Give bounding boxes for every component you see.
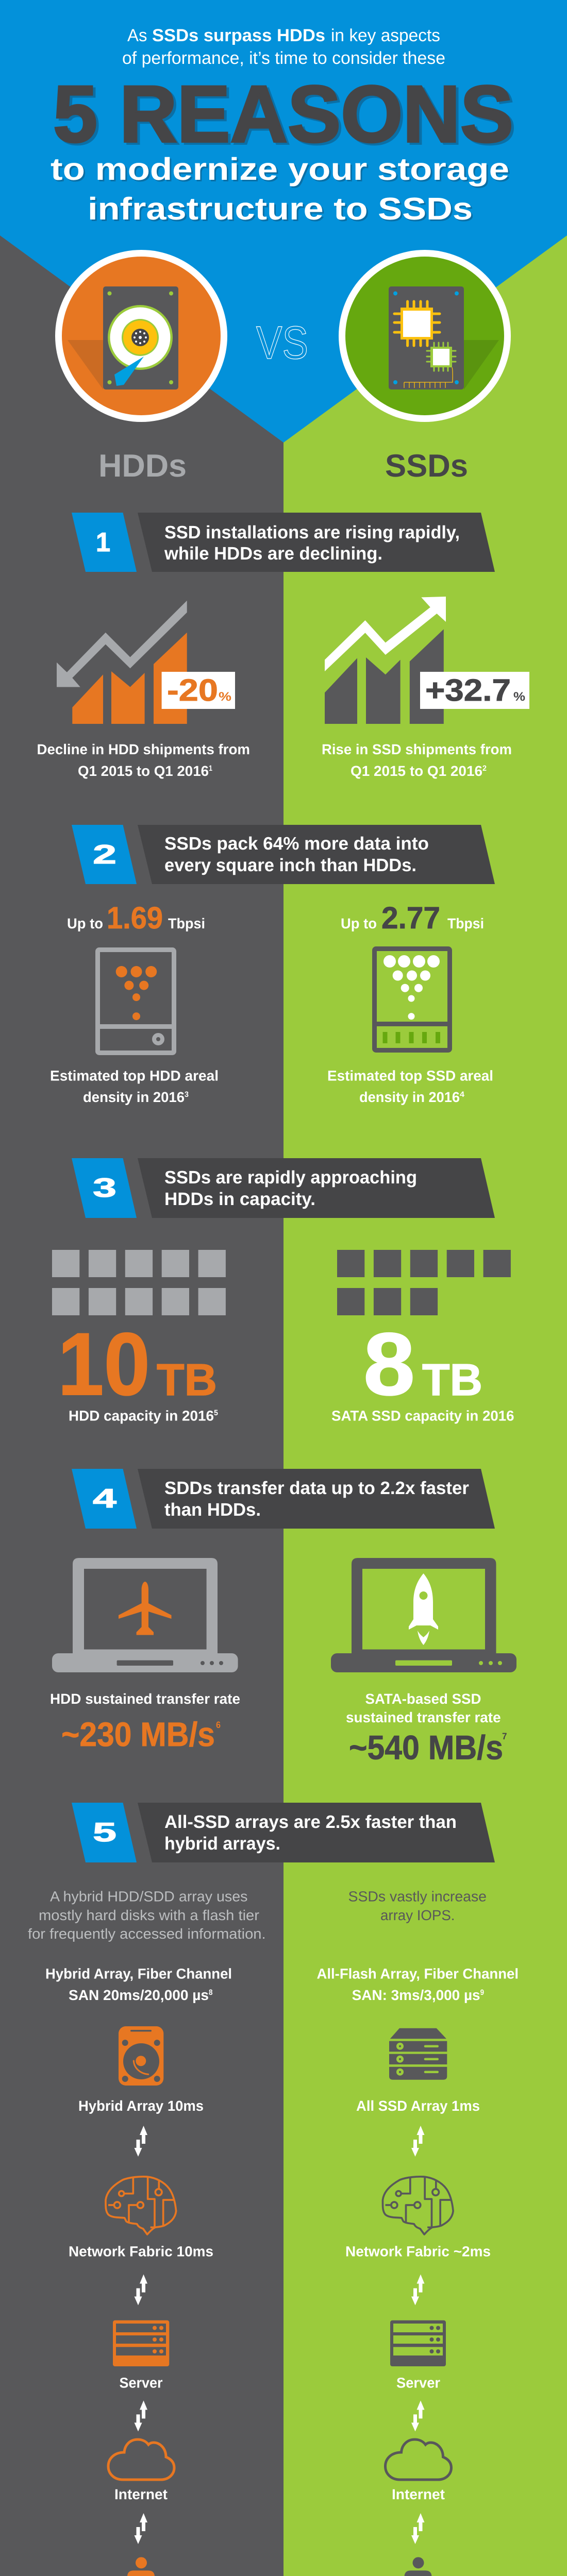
stat: HDD transfer rate: ~230 MB/s [61, 1715, 215, 1753]
caption: HDD density: Estimated top HDD areal [50, 1068, 219, 1084]
icon: end user, SSD [404, 2557, 431, 2576]
banner 5: hybrid arrays. [164, 1834, 280, 1854]
intro text [122, 26, 445, 68]
text: hybrid array description [28, 1889, 266, 1942]
banner 2: 2 [93, 840, 116, 870]
stat: SSD areal density: Tbpsi [447, 916, 484, 931]
subtitle [51, 151, 509, 226]
stat: 10 TB [58, 1315, 217, 1414]
squares: SSD capacity [337, 1250, 511, 1315]
banner 3 [72, 1158, 495, 1218]
stat: 8 TB: TB [422, 1355, 482, 1405]
caption: SSD density: Estimated top SSD areal [327, 1068, 493, 1084]
stat: 8 TB [363, 1315, 482, 1414]
icon: HDD badge [55, 250, 227, 422]
arrows: SSD path [411, 2126, 425, 2544]
stat: HDD transfer rate: 6 [216, 1720, 221, 1730]
caption: SSD shipments: 2 [482, 764, 487, 773]
squares: HDD capacity [52, 1250, 226, 1315]
icon: server, SSD [390, 2320, 446, 2366]
banner 4 [72, 1469, 495, 1529]
label: server SSD: Server [396, 2375, 440, 2391]
banner 2: every square inch than HDDs. [164, 855, 416, 875]
banner 3: HDDs in capacity. [164, 1189, 315, 1209]
caption: SSD shipments [322, 741, 512, 779]
caption: all-flash array latency: All-Flash Array, Fiber Channel [316, 1966, 519, 1982]
text: hybrid array description: mostly hard disks with a flash tier [39, 1907, 259, 1923]
caption: HDD density [50, 1068, 219, 1105]
chart: SSD rise: % [513, 690, 525, 704]
text: hybrid array description: for frequently accessed information. [28, 1926, 266, 1942]
caption: SSD density: density in 2016 [359, 1089, 460, 1105]
label: internet SSD: Internet [392, 2486, 445, 2502]
caption: hybrid array latency: Hybrid Array, Fiber Channel [45, 1966, 232, 1982]
caption: HDD capacity: 5 [214, 1409, 218, 1417]
banner 1 [72, 513, 495, 572]
caption: hybrid array latency: SAN 20ms/20,000 µs [69, 1987, 209, 2003]
stat: SSD transfer rate: sustained transfer rate [346, 1709, 501, 1725]
banner 4: SDDs transfer data up to 2.2x faster [164, 1478, 469, 1498]
intro text: in key aspects [331, 26, 440, 45]
banner 2: SSDs pack 64% more data into [164, 834, 429, 854]
arrows: hybrid path [134, 2126, 147, 2544]
caption: SSD shipments: Rise in SSD shipments from [322, 741, 512, 757]
banner 1: SSD installations are rising rapidly, [164, 522, 460, 543]
label: network fabric SSD: Network Fabric ~2ms [345, 2243, 491, 2260]
caption: hybrid array latency [45, 1966, 232, 2003]
stat: HDD transfer rate: HDD sustained transfer rate [50, 1691, 240, 1707]
stat: SSD transfer rate: SATA-based SSD [365, 1691, 481, 1707]
caption: SSD density [327, 1068, 493, 1105]
caption: SSD shipments: Q1 2015 to Q1 2016 [351, 763, 482, 779]
stat: HDD areal density [67, 901, 205, 935]
caption: hybrid array latency: 8 [209, 1988, 212, 1997]
chart: HDD decline: -20 [167, 673, 218, 707]
caption: HDD shipments: Decline in HDD shipments from [37, 741, 250, 757]
icon: SSD density device [372, 949, 452, 1050]
icon: cloud, SSD [386, 2439, 452, 2480]
caption: all-flash array latency [316, 1966, 519, 2003]
icon: laptop with rocket [331, 1558, 516, 1672]
banner 1: while HDDs are declining. [164, 544, 382, 564]
text: SSD array description: array IOPS. [380, 1907, 455, 1923]
chart: HDD decline [57, 601, 235, 724]
title: 5 REASONS: 5 REASONS [53, 70, 513, 159]
text: hybrid array description: A hybrid HDD/SDD array uses [50, 1889, 247, 1905]
stat: 8 TB: 8 [363, 1315, 415, 1414]
caption: HDD shipments: Q1 2015 to Q1 2016 [78, 763, 209, 779]
banner 3: 3 [93, 1173, 116, 1203]
stat: HDD areal density: Tbpsi [168, 916, 205, 931]
caption: all-flash array latency: 9 [480, 1988, 484, 1997]
text: SSD array description: SSDs vastly increase [348, 1889, 487, 1905]
banner 1: 1 [96, 528, 110, 557]
icon: server, hybrid [113, 2320, 169, 2366]
icon: cloud, hybrid [108, 2439, 174, 2480]
banner 5: All-SSD arrays are 2.5x faster than [164, 1812, 457, 1832]
banner 4: than HDDs. [164, 1500, 261, 1520]
chart: SSD rise: +32.7 [425, 673, 511, 707]
stat: 10 TB: 10 [58, 1315, 150, 1414]
banner 2 [72, 825, 495, 884]
icon: network fabric brain, hybrid [106, 2177, 176, 2234]
icon: HDD density device [95, 950, 176, 1053]
label: network fabric hybrid: Network Fabric 10ms [69, 2243, 213, 2260]
intro text: of performance, it’s time to consider these [122, 48, 445, 68]
caption: HDD density: density in 2016 [83, 1089, 185, 1105]
intro text: As [127, 26, 147, 45]
text: SSD array description [348, 1889, 487, 1923]
caption: HDD density: 3 [185, 1090, 189, 1099]
stat: SSD areal density: Up to [341, 916, 377, 931]
label: internet hybrid: Internet [114, 2486, 168, 2502]
heading: SSDs: SSDs [385, 448, 468, 484]
subtitle: infrastructure to SSDs [88, 191, 473, 226]
intro text: SSDs surpass HDDs [152, 26, 325, 45]
caption: all-flash array latency: SAN: 3ms/3,000 µs [352, 1987, 480, 2003]
vs label: VS [256, 317, 308, 369]
chart: SSD rise [325, 597, 529, 724]
stat: SSD areal density: 2.77 [381, 901, 440, 935]
banner 3: SSDs are rapidly approaching [164, 1167, 417, 1188]
stat: SSD areal density [341, 901, 484, 935]
caption: SSD capacity: SATA SSD capacity in 2016 [331, 1408, 514, 1424]
label: all SSD array time: All SSD Array 1ms [356, 2098, 480, 2114]
icon: all-SSD array stack [389, 2028, 447, 2080]
caption: HDD shipments [37, 741, 250, 779]
icon: SSD badge [339, 250, 511, 422]
heading: HDDs: HDDs [98, 448, 187, 484]
stat: HDD areal density: 1.69 [107, 901, 163, 935]
banner 4: 4 [93, 1484, 116, 1514]
icon: end user, hybrid [127, 2557, 155, 2576]
stat: HDD transfer rate [50, 1691, 240, 1753]
caption: SSD density: 4 [460, 1090, 465, 1099]
stat: SSD transfer rate: ~540 MB/s [349, 1728, 503, 1766]
caption: HDD capacity: HDD capacity in 2016 [69, 1408, 214, 1424]
label: hybrid array time: Hybrid Array 10ms [78, 2098, 204, 2114]
icon: network fabric brain, SSD [382, 2177, 453, 2234]
banner 5 [72, 1803, 495, 1862]
chart: HDD decline: % [219, 690, 231, 704]
icon: laptop with airplane [52, 1558, 238, 1672]
subtitle: to modernize your storage [51, 151, 509, 187]
label: server hybrid: Server [120, 2375, 163, 2391]
caption: HDD shipments: 1 [209, 764, 212, 773]
icon: hybrid array hard disk [119, 2026, 163, 2086]
stat: HDD areal density: Up to [67, 916, 103, 931]
banner 5: 5 [93, 1818, 116, 1848]
stat: 10 TB: TB [157, 1355, 217, 1405]
stat: SSD transfer rate: 7 [502, 1731, 507, 1741]
stat: SSD transfer rate [346, 1691, 507, 1766]
